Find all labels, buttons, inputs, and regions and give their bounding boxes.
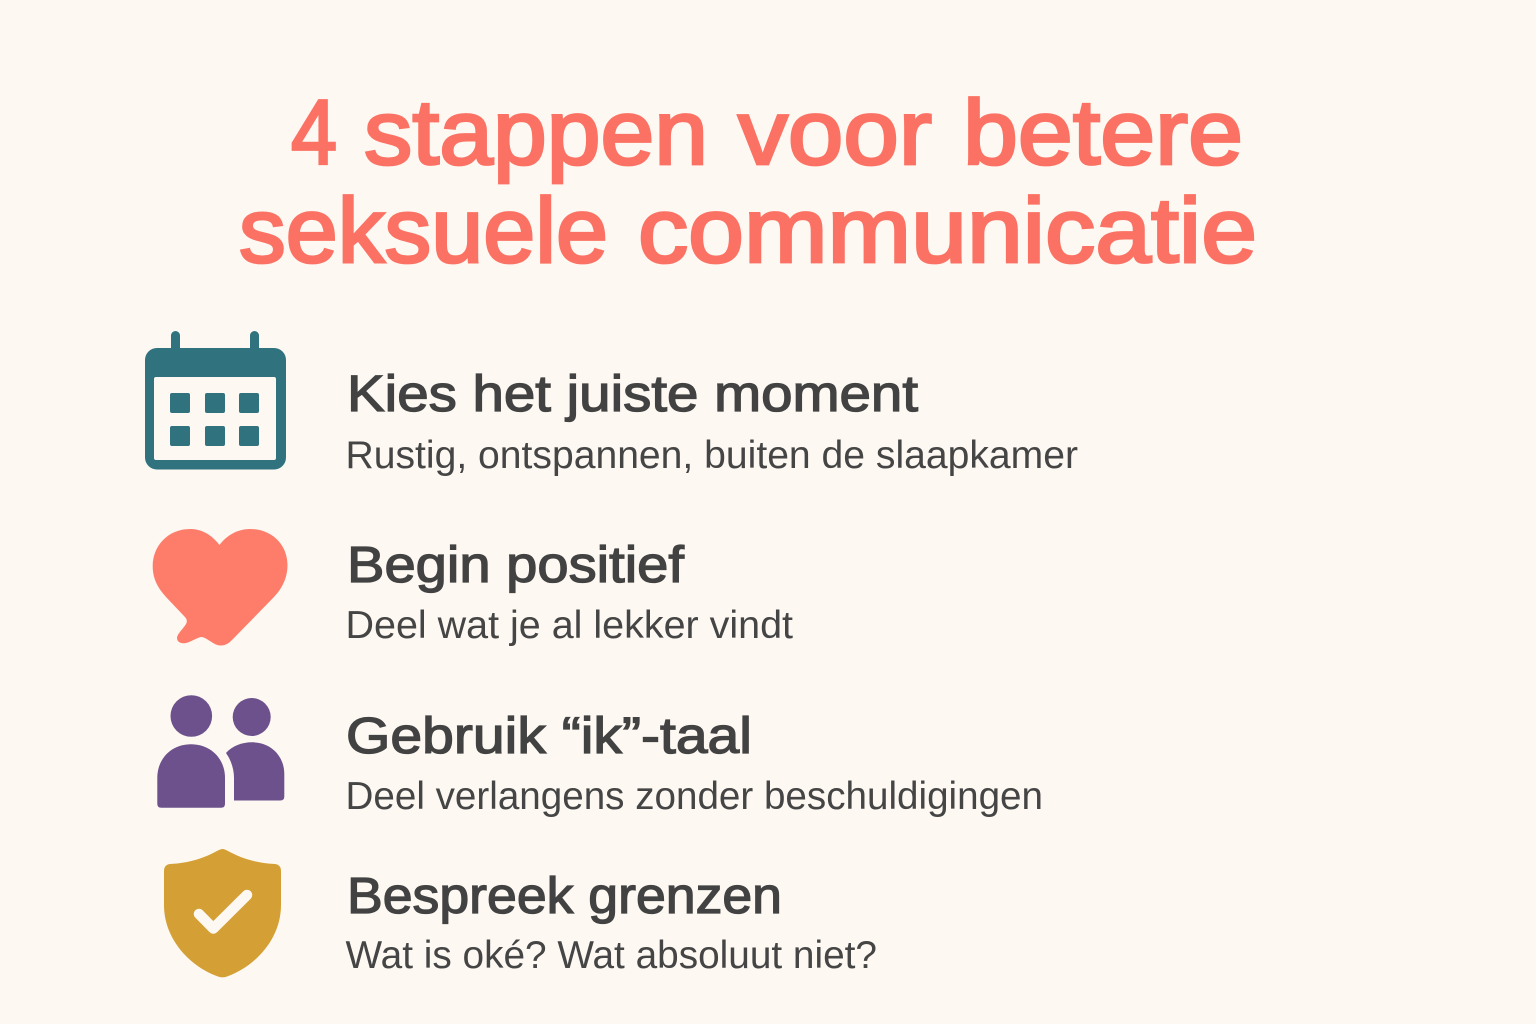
text: step 1 description: Rustig, ontspannen, buiten de slaapkamer xyxy=(346,434,1078,477)
icon: shield with check xyxy=(164,849,281,977)
heading: step 2: Begin positief xyxy=(347,536,685,593)
text: step 2 description: Deel wat je al lekker vindt xyxy=(346,604,793,647)
step 1 xyxy=(145,331,1078,477)
icon: two people xyxy=(157,695,284,808)
title: voor xyxy=(738,82,932,184)
title: betere xyxy=(963,82,1243,184)
text: step 4 description: Wat is oké? Wat absoluut niet? xyxy=(346,934,877,977)
step 2 xyxy=(153,529,793,647)
step 4 xyxy=(164,849,877,977)
heading: step 1: Kies het juiste moment xyxy=(347,365,918,422)
title: 4 xyxy=(291,82,337,184)
title: communicatie xyxy=(638,180,1257,282)
heading: step 4: Bespreek grenzen xyxy=(347,867,782,924)
text: step 3 description: Deel verlangens zonder beschuldigingen xyxy=(346,775,1043,818)
title: stappen xyxy=(364,82,708,184)
icon: calendar xyxy=(145,331,286,470)
title: seksuele xyxy=(239,180,608,282)
title xyxy=(239,82,1257,282)
step 3 xyxy=(157,695,1043,818)
heading: step 3: Gebruik “ik”-taal xyxy=(346,707,752,764)
icon: heart speech bubble xyxy=(153,529,288,646)
